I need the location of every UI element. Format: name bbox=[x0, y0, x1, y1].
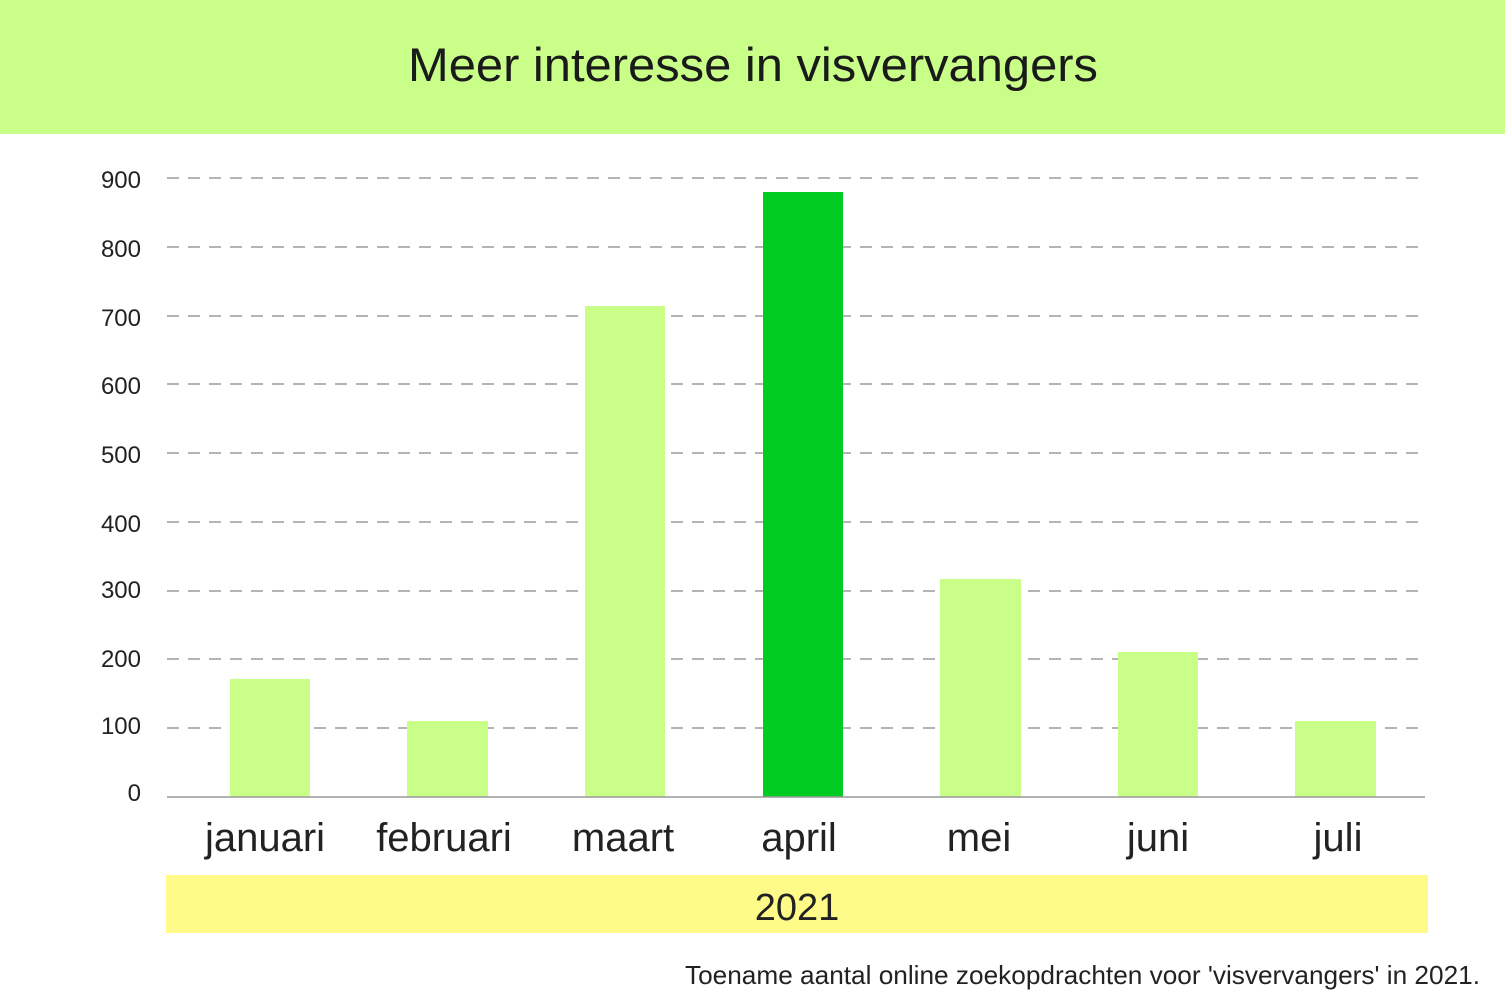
header band bbox=[0, 0, 1505, 134]
year band bbox=[166, 875, 1428, 933]
month labels: april bbox=[761, 816, 837, 860]
month labels: mei bbox=[947, 816, 1011, 860]
month labels: januari bbox=[204, 816, 325, 860]
y axis labels: 0 bbox=[128, 780, 141, 807]
y axis labels: 700 bbox=[101, 305, 141, 332]
y axis labels: 100 bbox=[101, 713, 141, 740]
bar chart bbox=[230, 192, 1376, 797]
title: Meer interesse in visvervangers bbox=[408, 38, 1098, 91]
y axis labels: 800 bbox=[101, 236, 141, 263]
y axis labels: 600 bbox=[101, 373, 141, 400]
month labels: februari bbox=[376, 816, 512, 860]
y axis labels: 300 bbox=[101, 577, 141, 604]
y axis labels: 200 bbox=[101, 646, 141, 673]
x axis bbox=[167, 796, 1425, 798]
y axis labels: 400 bbox=[101, 511, 141, 538]
footnote: Toename aantal online zoekopdrachten voor 'visvervangers' in 2021. bbox=[685, 960, 1480, 990]
month labels: juli bbox=[1313, 816, 1362, 860]
y axis labels: 900 bbox=[101, 167, 141, 194]
y axis labels: 500 bbox=[101, 442, 141, 469]
month labels: juni bbox=[1126, 816, 1189, 860]
month labels bbox=[204, 816, 1362, 860]
y axis labels bbox=[101, 167, 141, 807]
month labels: maart bbox=[572, 816, 674, 860]
year band: 2021 bbox=[755, 887, 839, 929]
gridlines bbox=[167, 178, 1425, 728]
